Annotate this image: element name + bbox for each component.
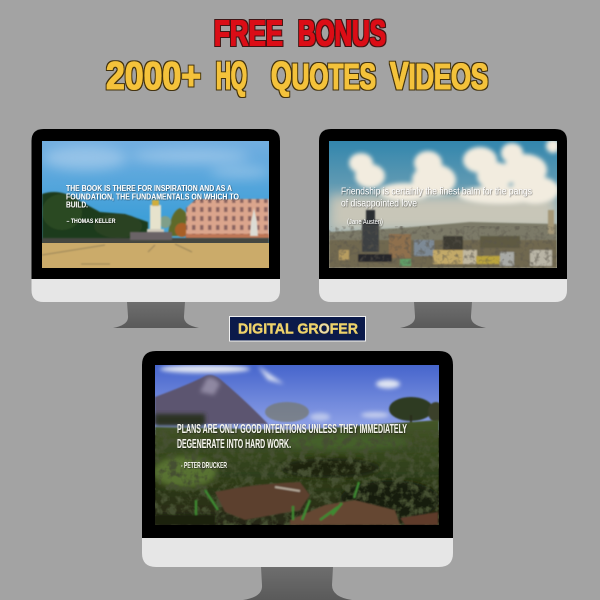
quote text left bbox=[66, 184, 239, 225]
monitor: right bbox=[319, 129, 567, 328]
monitor stand bottom bbox=[243, 567, 352, 600]
monitor bezel right bbox=[319, 129, 567, 279]
subtitle: 2000+ HQ Quotes Videos bbox=[106, 55, 488, 98]
logo: Digital Grofer bbox=[230, 316, 366, 341]
trees bbox=[42, 192, 193, 246]
screen: Kyiv square scene bbox=[42, 141, 270, 268]
quote text bottom: DEGENERATE INTO HARD WORK. bbox=[177, 436, 291, 451]
trees bbox=[264, 396, 439, 423]
screen: volcano and meadow scene bbox=[153, 365, 444, 525]
subtitle: 2000+ HQ Quotes Videos: HQ bbox=[216, 55, 247, 98]
title: free bonus: BONUS bbox=[298, 12, 386, 54]
screen: city and clouds scene bbox=[329, 139, 560, 268]
skyline bbox=[329, 210, 557, 268]
monitor: left bbox=[32, 129, 280, 328]
road strip bbox=[42, 238, 269, 244]
quote text left: – THOMAS KELLER bbox=[66, 219, 116, 225]
quote text left: FOUNDATION, THE FUNDAMENTALS ON WHICH TO bbox=[66, 192, 239, 202]
quote text right bbox=[341, 186, 532, 226]
monitor chin bottom bbox=[142, 538, 453, 567]
quote text bottom: - PETER DRUCKER bbox=[181, 460, 227, 470]
title: free bonus bbox=[214, 12, 386, 54]
monitor bezel left bbox=[32, 129, 280, 279]
subtitle: 2000+ HQ Quotes Videos: VIDEOS bbox=[390, 55, 488, 98]
monitor bezel bottom bbox=[142, 351, 453, 538]
quote text right: of disappointed love bbox=[341, 198, 417, 210]
monitor: bottom bbox=[142, 351, 453, 600]
meadow bbox=[155, 420, 439, 525]
quote text left: BUILD. bbox=[66, 200, 88, 210]
subtitle: 2000+ HQ Quotes Videos: 2000+ bbox=[106, 55, 201, 98]
volcano bbox=[155, 375, 268, 424]
monitor stand right bbox=[400, 302, 486, 328]
quote text bottom: PLANS ARE ONLY GOOD INTENTIONS UNLESS THEY IMMEDIATELY bbox=[177, 421, 407, 436]
pink building bbox=[186, 199, 269, 239]
plaza bbox=[42, 243, 269, 268]
quote text left: THE BOOK IS THERE FOR INSPIRATION AND AS A bbox=[66, 184, 232, 193]
quote text bottom bbox=[177, 421, 407, 470]
bell tower bbox=[147, 200, 164, 237]
foreground soil and leaves bbox=[155, 482, 438, 525]
logo: Digital Grofer: DIGITAL GROFER bbox=[238, 320, 358, 338]
monitor stand left bbox=[113, 302, 199, 328]
quote text right: Friendship is certainly the finest balm for the pangs bbox=[341, 186, 532, 198]
subtitle: 2000+ HQ Quotes Videos: QUOTES bbox=[271, 55, 376, 98]
quote text right: (Jane Austen) bbox=[347, 217, 383, 226]
title: free bonus: FREE bbox=[214, 12, 283, 54]
monitor chin right bbox=[319, 279, 567, 302]
monitor chin left bbox=[32, 279, 280, 302]
